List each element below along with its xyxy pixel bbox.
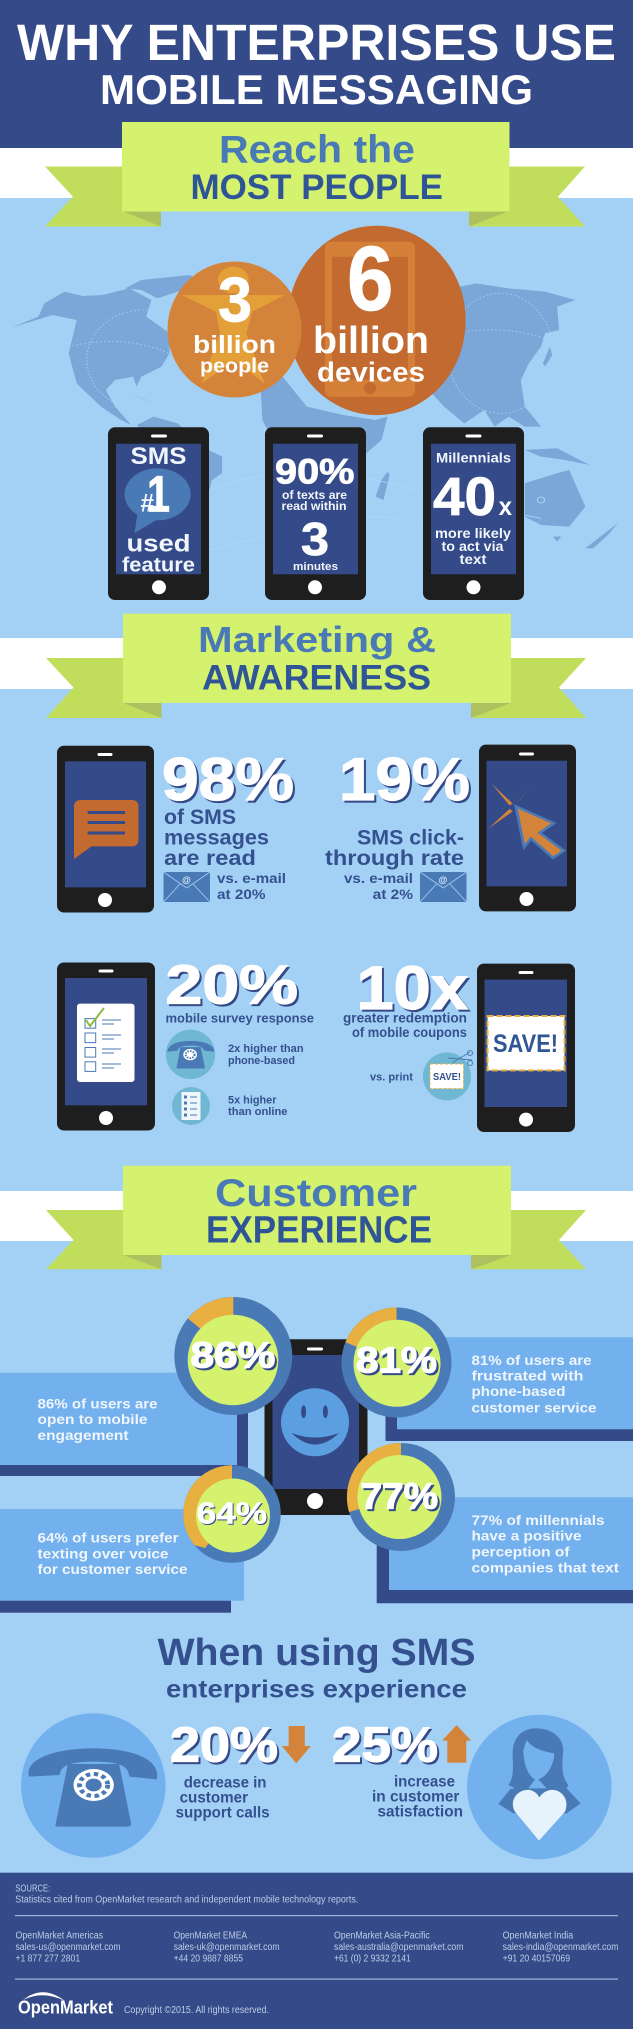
arrow: up [442,1725,471,1763]
stat: 20% mobile survey response: mobile survey response [166,1010,314,1026]
icon: envelope left: @ [182,875,191,885]
stat: 19% click-through rate: SMS click- [357,827,464,850]
phone: SMS #1 used feature: 1 [147,466,170,523]
phone: SMS #1 used feature: feature [122,555,195,577]
phone: save coupon [477,964,575,1132]
phone: millennials 40x: x [499,491,512,521]
donut: 86% [174,1297,292,1415]
panel: 86% open to mobile engagement: open to mobile [38,1411,148,1427]
phone: 90% read within 3 minutes: read within [282,499,346,513]
stat: 25% increase in satisfaction: in customer [372,1789,459,1806]
contact: asia-pacific: OpenMarket Asia-Pacific [334,1930,430,1941]
heading: when using SMS [158,1632,476,1703]
stat: 10x greater redemption: greater redemption [343,1010,467,1026]
source note: SOURCE: [15,1884,50,1895]
ribbon: reach the most people: Reach the [219,128,415,171]
panel: 64% prefer texting [0,1509,244,1613]
phone: 90% read within 3 minutes: 3 [301,513,329,565]
logo: OpenMarket: Open [18,1998,60,2018]
phone: smiley [264,1339,368,1515]
stat: 20% mobile survey response: phone-based [228,1055,295,1067]
phone: SMS #1 used feature: SMS [130,443,186,470]
source note: Statistics cited from OpenMarket research and independent mobile technology reports. [15,1895,358,1906]
ribbon: marketing and awareness [46,614,586,718]
panel: 81% frustrated with phone-based service: 81% of users are [472,1352,592,1368]
stat: 98% of SMS messages are read: 98% [162,746,294,813]
contact: india [503,1930,619,1965]
ribbon: customer experience: Customer [215,1172,417,1215]
arrow: down [282,1726,311,1763]
icon: coupon with scissors: SAVE! [433,1072,461,1083]
stat: 20% decrease in support calls: customer [180,1789,248,1806]
panel: 64% prefer texting: texting over voice [38,1545,169,1561]
phone: SMS #1 used feature: used [126,531,190,558]
phone: millennials 40x: Millennials [436,451,511,466]
phone: millennials 40x: text [460,552,487,567]
stat circle: 6 billion devices: devices [317,357,425,388]
header with title [0,0,633,148]
phone: checklist [57,962,155,1130]
phone: cursor click [479,745,576,911]
ribbon: reach the most people: MOST PEOPLE [190,168,443,207]
stat circle: 3 billion people: billion [193,331,276,359]
donut: 81% [342,1308,452,1418]
stat: 25% increase in satisfaction: satisfaction [378,1804,463,1821]
icon: envelope right [420,872,466,902]
stat: 25% increase in satisfaction [332,1719,463,1821]
contact: americas: sales-us@openmarket.com [16,1942,120,1953]
donut: 77%: 77% [360,1475,438,1516]
contact: emea: OpenMarket EMEA [174,1930,247,1941]
panel: 77% of millennials: perception of [472,1544,570,1560]
source note [15,1884,358,1906]
contact: india: +91 20 40157069 [503,1954,570,1965]
stat: 98% of SMS messages are read: at 20% [217,886,266,902]
stat: 20% decrease in support calls: decrease in [184,1775,266,1792]
phone: 90% read within 3 minutes: 90% [275,452,354,491]
contact: americas: +1 877 277 2801 [16,1954,80,1965]
stat: 20% mobile survey response: than online [228,1106,288,1118]
ribbon: marketing and awareness: Marketing & [198,619,436,660]
icon: envelope right: @ [438,875,448,885]
panel: 86% open to mobile engagement [0,1373,248,1476]
phone: message bubble [57,746,154,912]
footer [0,1873,633,2029]
panel: 77% of millennials: companies that text [472,1560,619,1576]
stat: 20% decrease in support calls [170,1719,278,1821]
phone: save coupon: SAVE! [493,1030,558,1058]
stat: 20% decrease in support calls: support calls [176,1804,270,1821]
contact: americas [16,1930,120,1965]
phone: 90% read within 3 minutes [265,427,366,600]
heading: when using SMS: enterprises experience [166,1675,467,1703]
icon: woman with heart [467,1715,612,1859]
stat: 10x greater redemption: vs. print [370,1071,413,1083]
contact: asia-pacific: sales-australia@openmarket.com [334,1942,464,1953]
panel: 81% frustrated with phone-based service: frustrated with [472,1368,584,1384]
contact: india: sales-india@openmarket.com [503,1942,619,1953]
stat: 98% of SMS messages are read: vs. e-mail [217,870,286,886]
stat: 19% click-through rate: through rate [325,847,464,870]
contact: asia-pacific [334,1930,464,1965]
stat: 98% of SMS messages are read: of SMS [164,806,236,829]
panel: 64% prefer texting: for customer service [38,1561,188,1577]
phone: SMS #1 used feature: # [140,490,154,518]
stat: 98% of SMS messages are read: are read [164,847,256,870]
phone: SMS #1 used feature [108,427,209,600]
phone: millennials 40x: 40 [433,467,496,527]
contact: americas: OpenMarket Americas [16,1930,103,1941]
panel: 81% frustrated with phone-based service: phone-based [472,1383,566,1399]
phone: millennials 40x: more likely [435,526,512,541]
donut: 64%: 64% [197,1495,267,1530]
panel: 81% frustrated with phone-based service: customer service [472,1400,597,1416]
stat: 10x greater redemption: of mobile coupons [352,1025,467,1040]
icon: checklist small [172,1087,210,1125]
panel: 86% open to mobile engagement: engagement [38,1427,129,1443]
panel: 81% frustrated with phone-based service [386,1337,633,1441]
header with title: MOBILE MESSAGING [100,66,533,113]
panel: 77% of millennials: 77% of millennials [472,1512,605,1528]
stat circle: 6 billion devices: billion [313,320,429,362]
panel: 86% open to mobile engagement: 86% of users are [38,1395,158,1411]
heading: when using SMS: When using SMS [158,1632,476,1674]
stat: 98% of SMS messages are read [162,746,294,902]
logo: OpenMarket [18,1992,113,2018]
contact: india: OpenMarket India [503,1930,574,1941]
phone: 90% read within 3 minutes: minutes [293,561,338,573]
phone: millennials 40x [423,427,524,600]
donut: 77% [347,1443,455,1551]
panel: 64% prefer texting: 64% of users prefer [38,1530,179,1546]
icon: telephone large [21,1713,166,1858]
stat: 20% mobile survey response: 2x higher than [228,1043,304,1055]
stat: 98% of SMS messages are read: messages [164,827,269,850]
icon: coupon with scissors [423,1050,472,1100]
stat: 19% click-through rate: at 2% [373,886,414,902]
stat: 20% mobile survey response: 20% [166,954,298,1016]
stat circle: 3 billion people: 3 [218,266,252,336]
stat: 10x greater redemption [343,954,468,1083]
stat: 20% mobile survey response: 5x higher [228,1095,277,1107]
donut: 81%: 81% [356,1340,437,1381]
header with title: WHY ENTERPRISES USE [17,14,616,71]
stat circle: 3 billion people [168,262,302,398]
panel: 77% of millennials: have a positive [472,1528,582,1544]
world map [12,275,618,550]
contact: asia-pacific: +61 (0) 2 9332 2141 [334,1954,411,1965]
stat circle: 6 billion devices: 6 [347,228,393,330]
stat: 19% click-through rate: vs. e-mail [344,870,413,886]
stat: 19% click-through rate: 19% [339,746,470,813]
stat: 10x greater redemption: 10x [356,954,468,1022]
icon: telephone small [166,1030,215,1079]
stat: 19% click-through rate [325,746,470,902]
contact: emea: +44 20 9887 8855 [174,1954,243,1965]
donut: 64% [183,1465,281,1563]
panel: 77% of millennials [377,1497,633,1603]
ribbon: marketing and awareness: AWARENESS [202,658,431,697]
stat: 20% mobile survey response [166,954,314,1118]
donut: 86%: 86% [190,1334,275,1375]
ribbon: reach the most people [45,122,585,226]
stat: 25% increase in satisfaction: 25% [332,1719,438,1773]
icon: envelope left [164,872,210,902]
stat circle: 6 billion devices [288,226,466,415]
stat: 20% decrease in support calls: 20% [170,1719,278,1773]
phone: 90% read within 3 minutes: of texts are [282,488,347,502]
stat: 25% increase in satisfaction: increase [394,1774,455,1791]
phone: millennials 40x: to act via [442,539,504,554]
contact: emea: sales-uk@openmarket.com [174,1942,280,1953]
ribbon: customer experience [46,1166,586,1269]
stat circle: 3 billion people: people [200,356,269,378]
copyright: Copyright ©2015. All rights reserved. [124,2005,269,2016]
contact: emea [174,1930,280,1965]
logo: OpenMarket: Market [60,1998,113,2018]
ribbon: customer experience: EXPERIENCE [206,1209,432,1251]
